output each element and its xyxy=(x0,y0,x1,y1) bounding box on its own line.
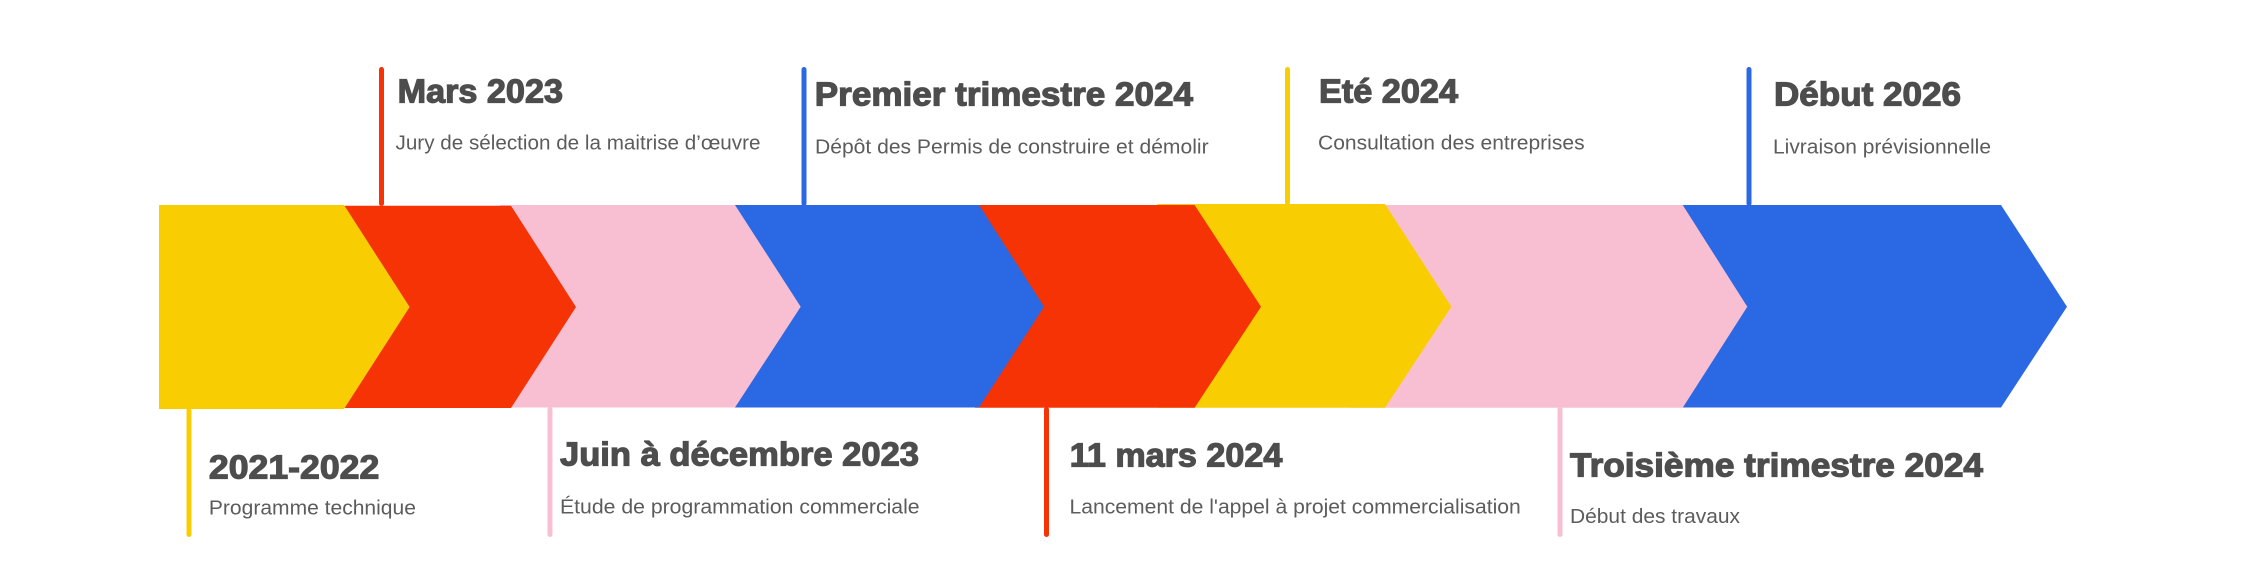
heading: Troisième trimestre 2024 xyxy=(1570,447,1984,484)
stem: red xyxy=(1044,407,1049,537)
stem: yellow xyxy=(186,408,192,537)
heading: Mars 2023 xyxy=(398,73,563,110)
chevron: red segment 1 xyxy=(340,206,576,408)
heading: 11 mars 2024 xyxy=(1070,437,1283,474)
chevron: pink segment 2 xyxy=(1350,205,1747,408)
description: Début des travaux xyxy=(1570,505,1741,528)
heading: Début 2026 xyxy=(1774,76,1961,113)
milestone: 2021-2022 xyxy=(186,408,416,537)
heading: Premier trimestre 2024 xyxy=(815,76,1194,113)
description: Étude de programmation commerciale xyxy=(560,495,920,518)
stem: blue xyxy=(802,67,806,206)
heading: 2021-2022 xyxy=(209,448,379,486)
milestone: Début 2026 xyxy=(1746,67,1991,206)
milestone: Eté 2024 xyxy=(1285,67,1585,205)
heading: Eté 2024 xyxy=(1319,73,1459,110)
milestone: Troisième trimestre 2024 xyxy=(1558,407,1984,537)
description: Consultation des entreprises xyxy=(1318,131,1585,154)
description: Programme technique xyxy=(209,497,416,520)
description: Lancement de l'appel à projet commercialisation xyxy=(1070,495,1521,518)
description: Jury de sélection de la maitrise d’œuvre xyxy=(396,131,760,154)
description: Dépôt des Permis de construire et démolir xyxy=(815,135,1209,158)
milestone: 11 mars 2024 xyxy=(1044,407,1521,537)
chevron: yellow segment 1 xyxy=(159,205,410,409)
heading: Juin à décembre 2023 xyxy=(560,436,919,473)
stem: pink xyxy=(548,407,552,537)
description: Livraison prévisionnelle xyxy=(1773,135,1991,158)
milestone: Mars 2023 xyxy=(379,67,760,206)
chevron: final blue arrow xyxy=(1650,205,2067,408)
milestone: Premier trimestre 2024 xyxy=(802,67,1209,206)
stem: red xyxy=(379,67,384,206)
chevron: red segment 2 xyxy=(975,205,1261,408)
stem: yellow xyxy=(1285,67,1290,205)
chevron: yellow segment 2 xyxy=(1158,204,1451,408)
chevron: pink segment 1 xyxy=(500,205,801,408)
stem: blue xyxy=(1746,67,1752,206)
chevron arrow band xyxy=(159,204,2067,409)
chevron: blue segment 1 xyxy=(700,205,1044,408)
milestone: Juin à décembre 2023 xyxy=(548,407,920,537)
stem: pink xyxy=(1558,407,1562,537)
